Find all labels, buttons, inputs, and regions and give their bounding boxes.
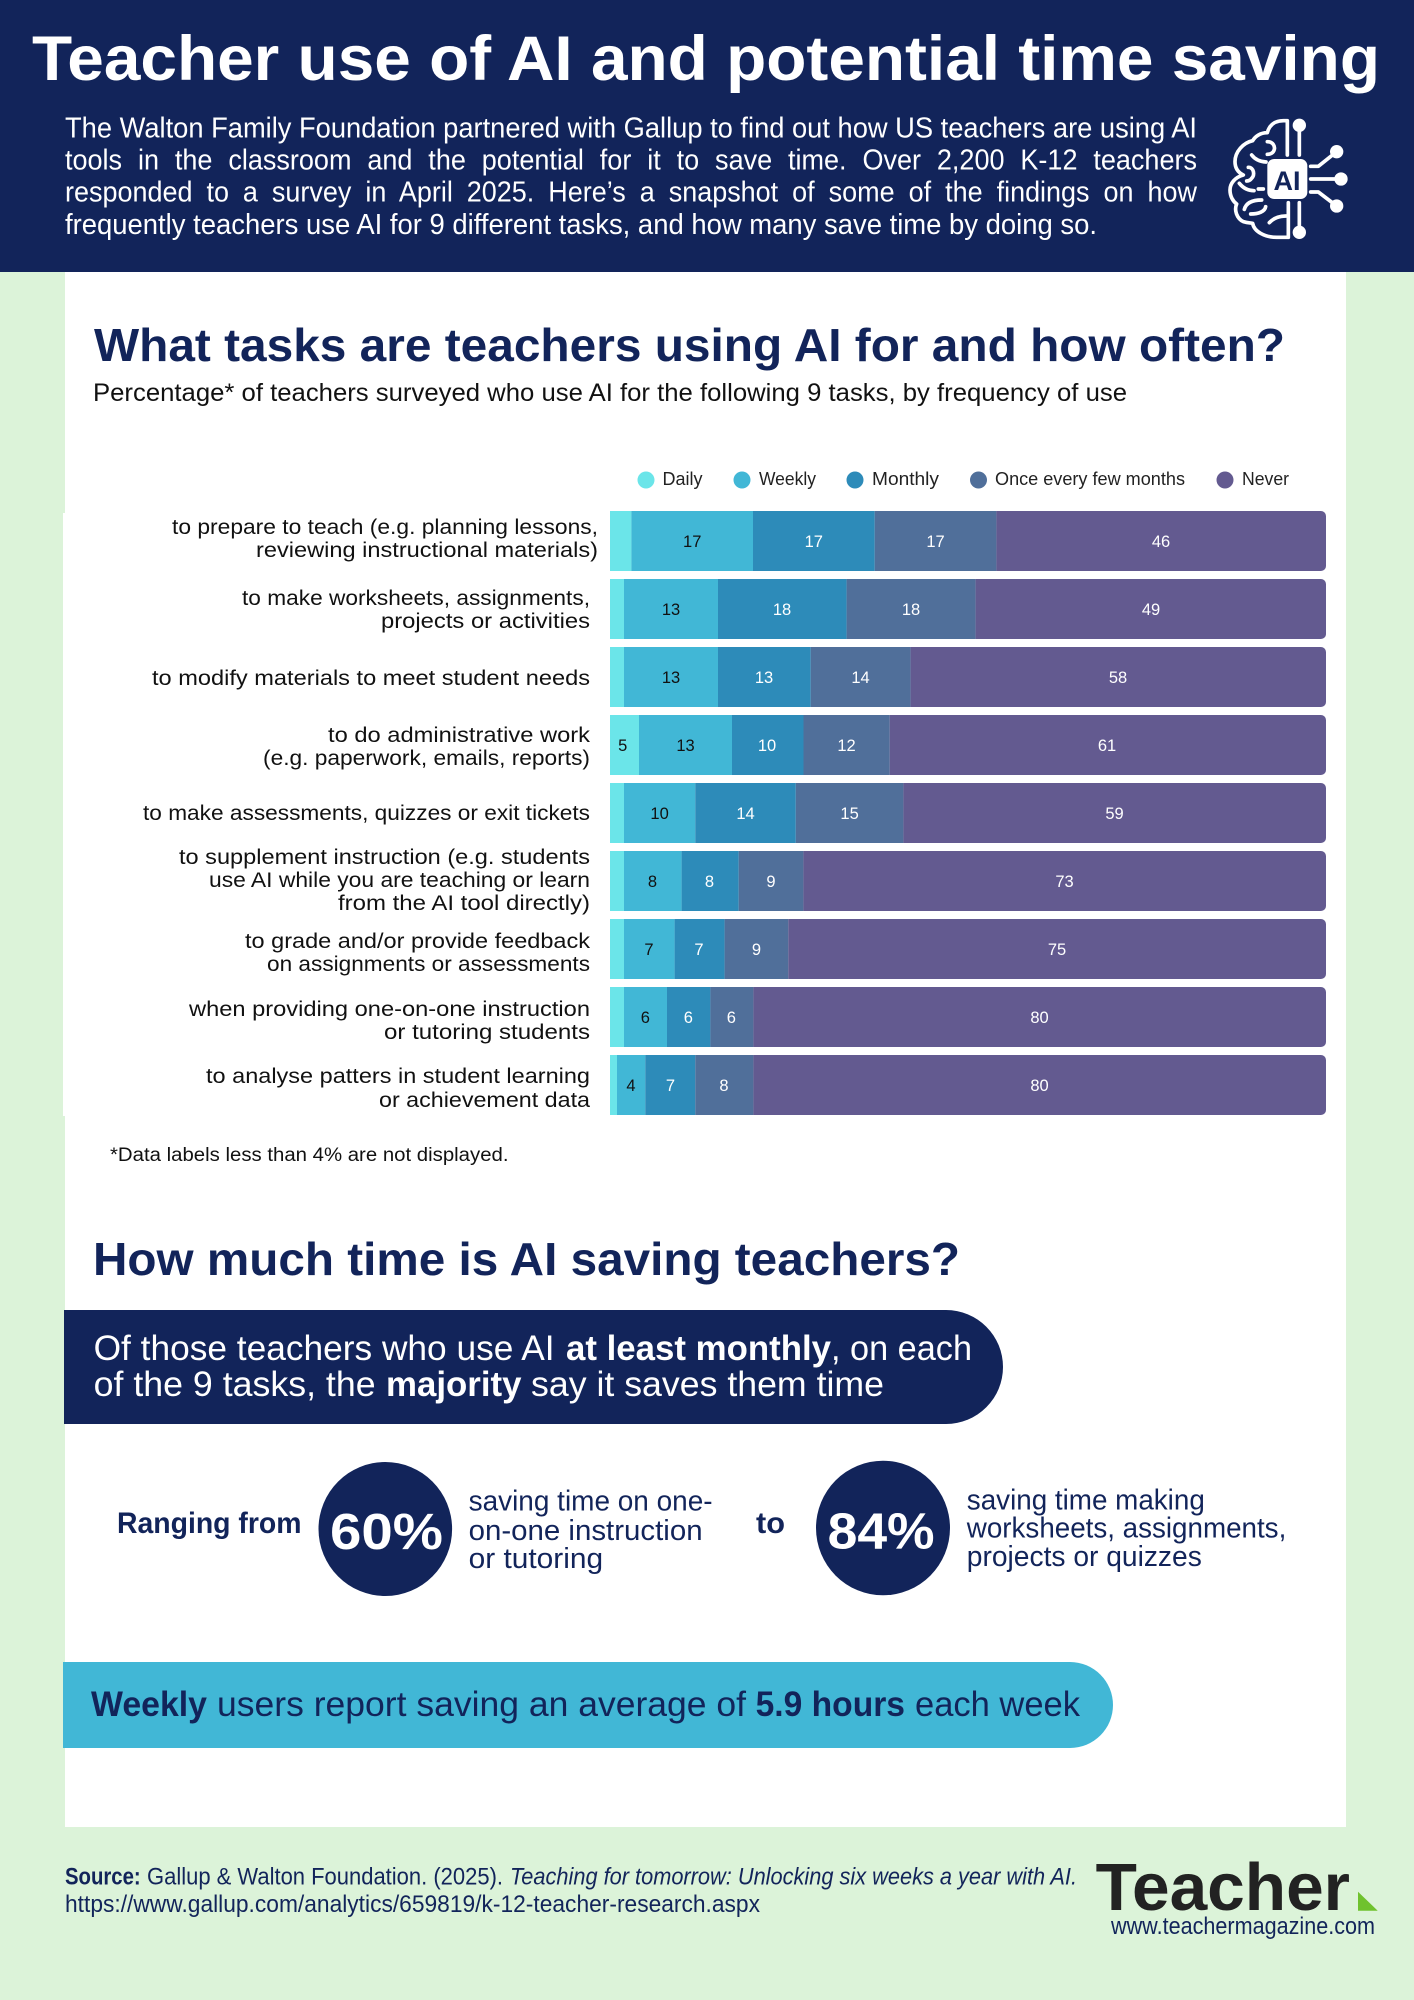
header band bbox=[0, 0, 1414, 272]
bar 1: prepare to teach: 17 bbox=[683, 533, 701, 551]
stat text: 84% bbox=[966, 1484, 1286, 1573]
source citation: Teaching for tomorrow: Unlocking six weeks a year with AI. bbox=[510, 1864, 1077, 1890]
bar 3: modify materials: 13 bbox=[755, 669, 773, 687]
task labels: from the AI tool directly) bbox=[338, 892, 590, 915]
bar 1: prepare to teach: 46 bbox=[1152, 533, 1170, 551]
task labels: projects or activities bbox=[381, 610, 590, 633]
callout: majority save time bbox=[64, 1310, 1003, 1424]
legend: once every few months: Once every few months bbox=[995, 469, 1185, 489]
bar 5: assessments: 10 bbox=[650, 805, 669, 823]
legend: monthly: Monthly bbox=[872, 469, 939, 489]
bar 3: modify materials bbox=[610, 647, 1326, 707]
bar 4: administrative work: 10 bbox=[758, 737, 776, 755]
bar 6: supplement instruction: 73 bbox=[1055, 873, 1074, 891]
bar 7: grade and feedback: 9 bbox=[752, 941, 761, 959]
stat circle: 60%: 60% bbox=[330, 1503, 443, 1560]
bar 9: analyse patterns: 80 bbox=[1030, 1077, 1049, 1095]
callout: majority save time: say it saves them time bbox=[531, 1365, 884, 1404]
bar 9: analyse patterns: 4 bbox=[626, 1077, 636, 1095]
logo: Teacher magazine: www.teachermagazine.com bbox=[1110, 1913, 1375, 1940]
stat text: 84%: saving time making bbox=[967, 1484, 1205, 1516]
bar 8: one-on-one instruction: 6 bbox=[641, 1009, 650, 1027]
legend: never bbox=[1216, 469, 1289, 489]
bar 2: worksheets: 18 bbox=[773, 601, 791, 619]
source citation: Source: bbox=[65, 1864, 141, 1890]
bar 5: assessments: 15 bbox=[840, 805, 859, 823]
task labels: to grade and/or provide feedback bbox=[245, 930, 591, 953]
bar 4: administrative work: 61 bbox=[1098, 737, 1116, 755]
task labels: to make assessments, quizzes or exit tickets bbox=[143, 802, 590, 825]
callout: majority save time: Of those teachers who use AI bbox=[94, 1329, 555, 1368]
heading: tasks: What tasks are teachers using AI for and how often? bbox=[94, 319, 1285, 371]
logo: Teacher magazine: Teacher bbox=[1096, 1850, 1350, 1925]
bar 7: grade and feedback: 75 bbox=[1048, 941, 1066, 959]
task labels: or achievement data bbox=[379, 1089, 590, 1112]
task labels bbox=[143, 516, 598, 1112]
task labels: to make worksheets, assignments, bbox=[242, 587, 590, 610]
task labels: or tutoring students bbox=[384, 1021, 590, 1044]
stat circle: 60% bbox=[318, 1462, 452, 1596]
task labels: when providing one-on-one instruction bbox=[188, 998, 590, 1021]
icon: AI brain bbox=[1230, 119, 1348, 239]
bar 2: worksheets bbox=[610, 579, 1326, 639]
bar 6: supplement instruction bbox=[610, 851, 1326, 911]
bar 8: one-on-one instruction bbox=[610, 987, 1326, 1047]
stat circle: 84%: 84% bbox=[828, 1503, 935, 1560]
bar 8: one-on-one instruction: 80 bbox=[1030, 1009, 1049, 1027]
bar 3: modify materials: 14 bbox=[851, 669, 870, 687]
stat text: 60%: or tutoring bbox=[469, 1543, 603, 1575]
callout: majority save time: at least monthly bbox=[566, 1329, 832, 1368]
task labels: to modify materials to meet student needs bbox=[152, 667, 590, 690]
source citation: https://www.gallup.com/analytics/659819/k-12-teacher-research.aspx bbox=[65, 1891, 760, 1918]
stat text: 60%: saving time on one- bbox=[469, 1486, 713, 1518]
stat text: 60%: on-one instruction bbox=[469, 1515, 703, 1547]
task labels: to prepare to teach (e.g. planning lessons, bbox=[172, 516, 598, 539]
intro text block: responded to a survey in April 2025. Here’s a snapshot of some of the findings on how bbox=[65, 176, 1198, 208]
legend: monthly bbox=[846, 469, 939, 489]
intro text block: frequently teachers use AI for 9 different tasks, and how many save time by doing so. bbox=[65, 209, 1097, 241]
callout: weekly hours saved: users report saving an average of bbox=[217, 1685, 746, 1724]
bar 7: grade and feedback bbox=[610, 919, 1326, 979]
bar 6: supplement instruction: 8 bbox=[705, 873, 714, 891]
stat text: 60% bbox=[469, 1486, 713, 1575]
stacked bar chart bbox=[610, 511, 1326, 1115]
callout: majority save time: majority bbox=[386, 1365, 522, 1404]
ranging from label: Ranging from bbox=[117, 1507, 302, 1540]
bar 7: grade and feedback: 7 bbox=[694, 941, 704, 959]
legend: never: Never bbox=[1242, 469, 1289, 489]
stat row: ranging from 60% to 84% bbox=[117, 1461, 1286, 1596]
bar 5: assessments: 59 bbox=[1105, 805, 1124, 823]
task labels: to supplement instruction (e.g. students bbox=[179, 846, 590, 869]
bar 4: administrative work: 12 bbox=[837, 737, 856, 755]
intro text block: The Walton Family Foundation partnered with Gallup to find out how US teachers are using AI bbox=[65, 112, 1197, 144]
task labels: on assignments or assessments bbox=[267, 953, 590, 976]
bar 1: prepare to teach: 17 bbox=[926, 533, 945, 551]
task labels: to analyse patters in student learning bbox=[206, 1065, 590, 1088]
legend: weekly bbox=[734, 469, 816, 489]
panel: white content card bbox=[63, 272, 1346, 1827]
callout: weekly hours saved: Weekly bbox=[91, 1685, 208, 1724]
bar 3: modify materials: 13 bbox=[662, 669, 680, 687]
task labels: to do administrative work bbox=[328, 724, 591, 747]
bar 1: prepare to teach bbox=[610, 511, 1326, 571]
bar 8: one-on-one instruction: 6 bbox=[684, 1009, 693, 1027]
task labels: (e.g. paperwork, emails, reports) bbox=[263, 747, 590, 770]
bar 1: prepare to teach: 17 bbox=[805, 533, 823, 551]
callout: majority save time: of the 9 tasks, the bbox=[94, 1365, 376, 1404]
intro text block bbox=[65, 112, 1198, 241]
source citation bbox=[65, 1864, 1077, 1918]
bar 6: supplement instruction: 8 bbox=[648, 873, 657, 891]
bar 5: assessments: 14 bbox=[736, 805, 755, 823]
callout: majority save time: , on each bbox=[831, 1329, 972, 1368]
task labels: reviewing instructional materials) bbox=[256, 539, 598, 562]
stat text: 84%: worksheets, assignments, bbox=[966, 1513, 1286, 1545]
bar 4: administrative work: 13 bbox=[676, 737, 695, 755]
bar 2: worksheets: 49 bbox=[1142, 601, 1160, 619]
callout: weekly hours saved: each week bbox=[915, 1685, 1080, 1724]
icon: AI brain: AI bbox=[1274, 166, 1300, 196]
source citation: Gallup & Walton Foundation. (2025). bbox=[147, 1864, 503, 1890]
legend: daily bbox=[638, 469, 702, 489]
stat text: 84%: projects or quizzes bbox=[967, 1541, 1202, 1573]
chart footnote: *Data labels less than 4% are not displayed. bbox=[110, 1145, 508, 1166]
bar 7: grade and feedback: 7 bbox=[644, 941, 654, 959]
bar 9: analyse patterns: 7 bbox=[666, 1077, 675, 1095]
intro text block: tools in the classroom and the potential for it to save time. Over 2,200 K-12 teachers bbox=[65, 144, 1197, 176]
stat circle: 84% bbox=[816, 1461, 950, 1595]
task labels: use AI while you are teaching or learn bbox=[209, 869, 590, 892]
bar 9: analyse patterns: 8 bbox=[719, 1077, 729, 1095]
legend bbox=[638, 469, 1289, 489]
bar 9: analyse patterns bbox=[610, 1055, 1326, 1115]
bar 8: one-on-one instruction: 6 bbox=[727, 1009, 736, 1027]
bar 4: administrative work: 5 bbox=[618, 737, 627, 755]
bar 5: assessments bbox=[610, 783, 1326, 843]
legend: weekly: Weekly bbox=[759, 469, 816, 489]
legend: daily: Daily bbox=[662, 469, 702, 489]
bar 2: worksheets: 13 bbox=[662, 601, 680, 619]
bar 4: administrative work bbox=[610, 715, 1326, 775]
heading: time saved: How much time is AI saving teachers? bbox=[93, 1233, 960, 1285]
title: Teacher use of AI and potential time saving bbox=[32, 24, 1380, 94]
bar 6: supplement instruction: 9 bbox=[766, 873, 776, 891]
bar 2: worksheets: 18 bbox=[902, 601, 920, 619]
callout: weekly hours saved bbox=[63, 1662, 1113, 1748]
bar 3: modify materials: 58 bbox=[1109, 669, 1127, 687]
callout: weekly hours saved: 5.9 hours bbox=[756, 1685, 905, 1724]
to label: to bbox=[756, 1507, 785, 1540]
chart subtitle: Percentage* of teachers surveyed who use AI for the following 9 tasks, by frequency of use bbox=[93, 379, 1127, 407]
